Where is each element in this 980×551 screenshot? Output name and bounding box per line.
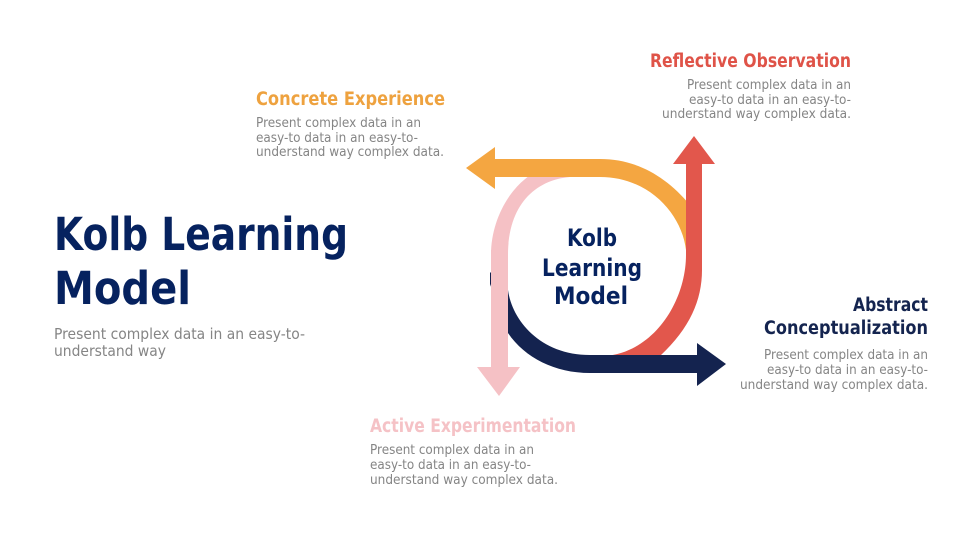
subtitle text: Present complex data in an easy-to-	[54, 325, 305, 343]
text block: Active Experimentation	[370, 416, 576, 488]
arrow: orange	[466, 147, 690, 250]
text block: Abstract Conceptualization: understand way complex data.	[740, 378, 928, 393]
text block: Abstract Conceptualization: Abstract	[853, 295, 928, 316]
arrow: navy	[490, 272, 726, 386]
text block: Concrete Experience: understand way complex data.	[256, 145, 444, 160]
title: Kolb Learning	[54, 208, 348, 261]
title	[54, 208, 348, 315]
center label: Learning	[542, 254, 642, 282]
text block: Active Experimentation: Active Experimentation	[370, 416, 576, 437]
text block: Concrete Experience: Present complex data in an	[256, 116, 421, 131]
text block: Active Experimentation: easy-to data in an easy-to-	[370, 458, 531, 473]
text block: Concrete Experience: easy-to data in an easy-to-	[256, 131, 418, 146]
text block: Active Experimentation: understand way complex data.	[370, 473, 558, 488]
title: Model	[54, 262, 191, 315]
subtitle text: understand way	[54, 342, 166, 360]
arrow: red	[605, 136, 715, 356]
arrow: pink upper curve	[491, 170, 590, 300]
center label: Model	[554, 282, 628, 310]
text block: Reflective Observation: understand way complex data.	[662, 107, 851, 122]
text block: Active Experimentation: Present complex data in an	[370, 443, 534, 458]
text block: Concrete Experience	[256, 89, 445, 160]
text block: Reflective Observation: Reflective Observation	[650, 51, 851, 72]
text block: Abstract Conceptualization: Conceptualization	[764, 318, 928, 339]
cycle diagram	[466, 136, 726, 396]
text block: Abstract Conceptualization: Present complex data in an	[764, 348, 928, 363]
text block: Concrete Experience: Concrete Experience	[256, 89, 445, 110]
subtitle text	[54, 325, 305, 360]
arrow: pink lower shaft and head	[477, 250, 520, 396]
text block: Reflective Observation: Present complex data in an	[687, 78, 851, 93]
text block: Abstract Conceptualization	[740, 295, 928, 393]
text block: Reflective Observation: easy-to data in an easy-to-	[689, 93, 851, 108]
center label: Kolb	[567, 224, 617, 252]
text block: Reflective Observation	[650, 51, 851, 122]
text block: Abstract Conceptualization: easy-to data in an easy-to-	[767, 363, 928, 378]
center label	[542, 224, 642, 310]
